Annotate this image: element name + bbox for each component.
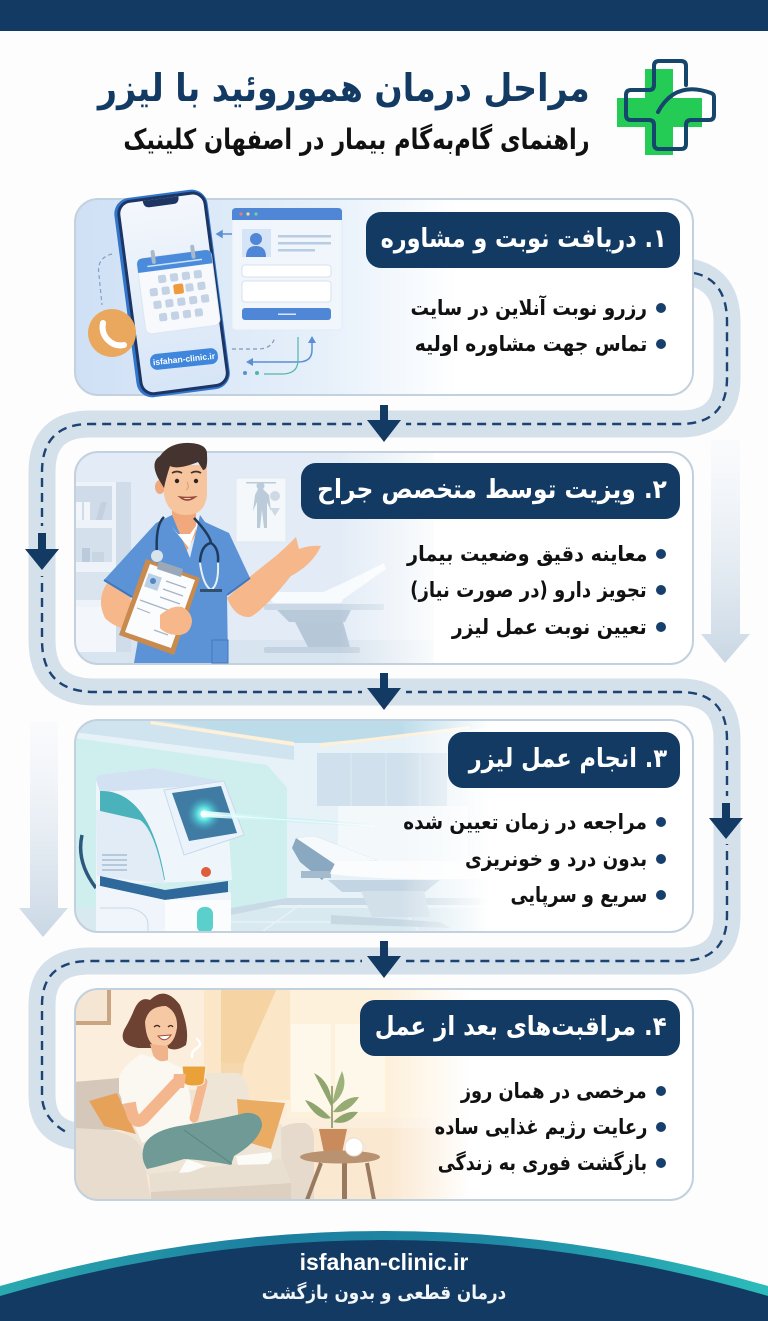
step 2 heading	[301, 463, 680, 519]
step 1 heading	[366, 212, 680, 268]
step 1 heading: ۱. دریافت نوبت و مشاوره	[381, 224, 667, 254]
url pill: isfahan-clinic.ir	[152, 351, 216, 367]
arrow 3 to 4	[367, 941, 401, 978]
form window	[217, 208, 342, 375]
plant and table	[300, 1071, 380, 1200]
step 1 bullet: تماس جهت مشاوره اولیه	[415, 332, 647, 356]
faded arrow right	[701, 477, 750, 663]
step 3 bullet: سریع و سرپایی	[510, 883, 647, 907]
step 3 bullet: مراجعه در زمان تعیین شده	[403, 810, 647, 834]
illustration: laser machine and bed	[74, 719, 694, 933]
url pill	[149, 347, 219, 371]
step 1 bullet: رزرو نوبت آنلاین در سایت	[410, 296, 647, 320]
step 3 heading	[448, 732, 680, 788]
faded arrow left	[19, 757, 68, 937]
title: مراحل درمان هموروئید با لیزر	[98, 66, 590, 110]
step 4 heading	[360, 1000, 680, 1056]
woman figure	[119, 994, 272, 1173]
step 3 heading: ۳. انجام عمل لیزر	[469, 744, 667, 774]
step 3 bullet: بدون درد و خونریزی	[465, 847, 647, 871]
subtitle: راهنمای گام‌به‌گام بیمار در اصفهان کلینیک	[124, 123, 590, 156]
header	[96, 59, 716, 156]
step 2 heading: ۲. ویزیت توسط متخصص جراح	[317, 475, 667, 505]
footer curved band	[0, 1231, 768, 1321]
step 4 heading: ۴. مراقبت‌های بعد از عمل	[375, 1012, 667, 1042]
footer website: isfahan-clinic.ir	[300, 1249, 468, 1275]
sofa	[74, 1073, 314, 1200]
top bar	[0, 0, 768, 31]
laser machine	[81, 768, 244, 933]
icon: medical cross logo	[617, 59, 716, 155]
arrow flow left	[25, 533, 59, 570]
step 4 bullet: رعایت رژیم غذایی ساده	[434, 1115, 647, 1139]
arrow 2 to 3	[367, 673, 401, 710]
arrow flow right	[709, 803, 743, 839]
step 2 bullet: تعیین نوبت عمل لیزر	[452, 615, 647, 639]
arrow 1 to 2	[367, 405, 401, 442]
doctor figure	[101, 443, 321, 663]
panel: step 1 booking	[74, 198, 694, 396]
illustration: phone calendar and form	[74, 190, 694, 398]
panel: step 4 aftercare	[74, 988, 694, 1201]
panel: step 3 laser procedure	[74, 719, 694, 933]
step 4 bullet: مرخصی در همان روز	[461, 1079, 647, 1103]
footer	[0, 1231, 768, 1321]
panel: step 2 surgeon visit	[74, 451, 694, 665]
step 2 bullet: تجویز دارو (در صورت نیاز)	[411, 578, 647, 602]
footer tagline: درمان قطعی و بدون بازگشت	[262, 1282, 506, 1304]
illustration: woman relaxing with tea	[74, 988, 694, 1201]
step 4 bullet: بازگشت فوری به زندگی	[438, 1151, 647, 1175]
step 2 bullet: معاینه دقیق وضعیت بیمار	[407, 542, 647, 566]
illustration: doctor in clinic	[74, 442, 694, 665]
